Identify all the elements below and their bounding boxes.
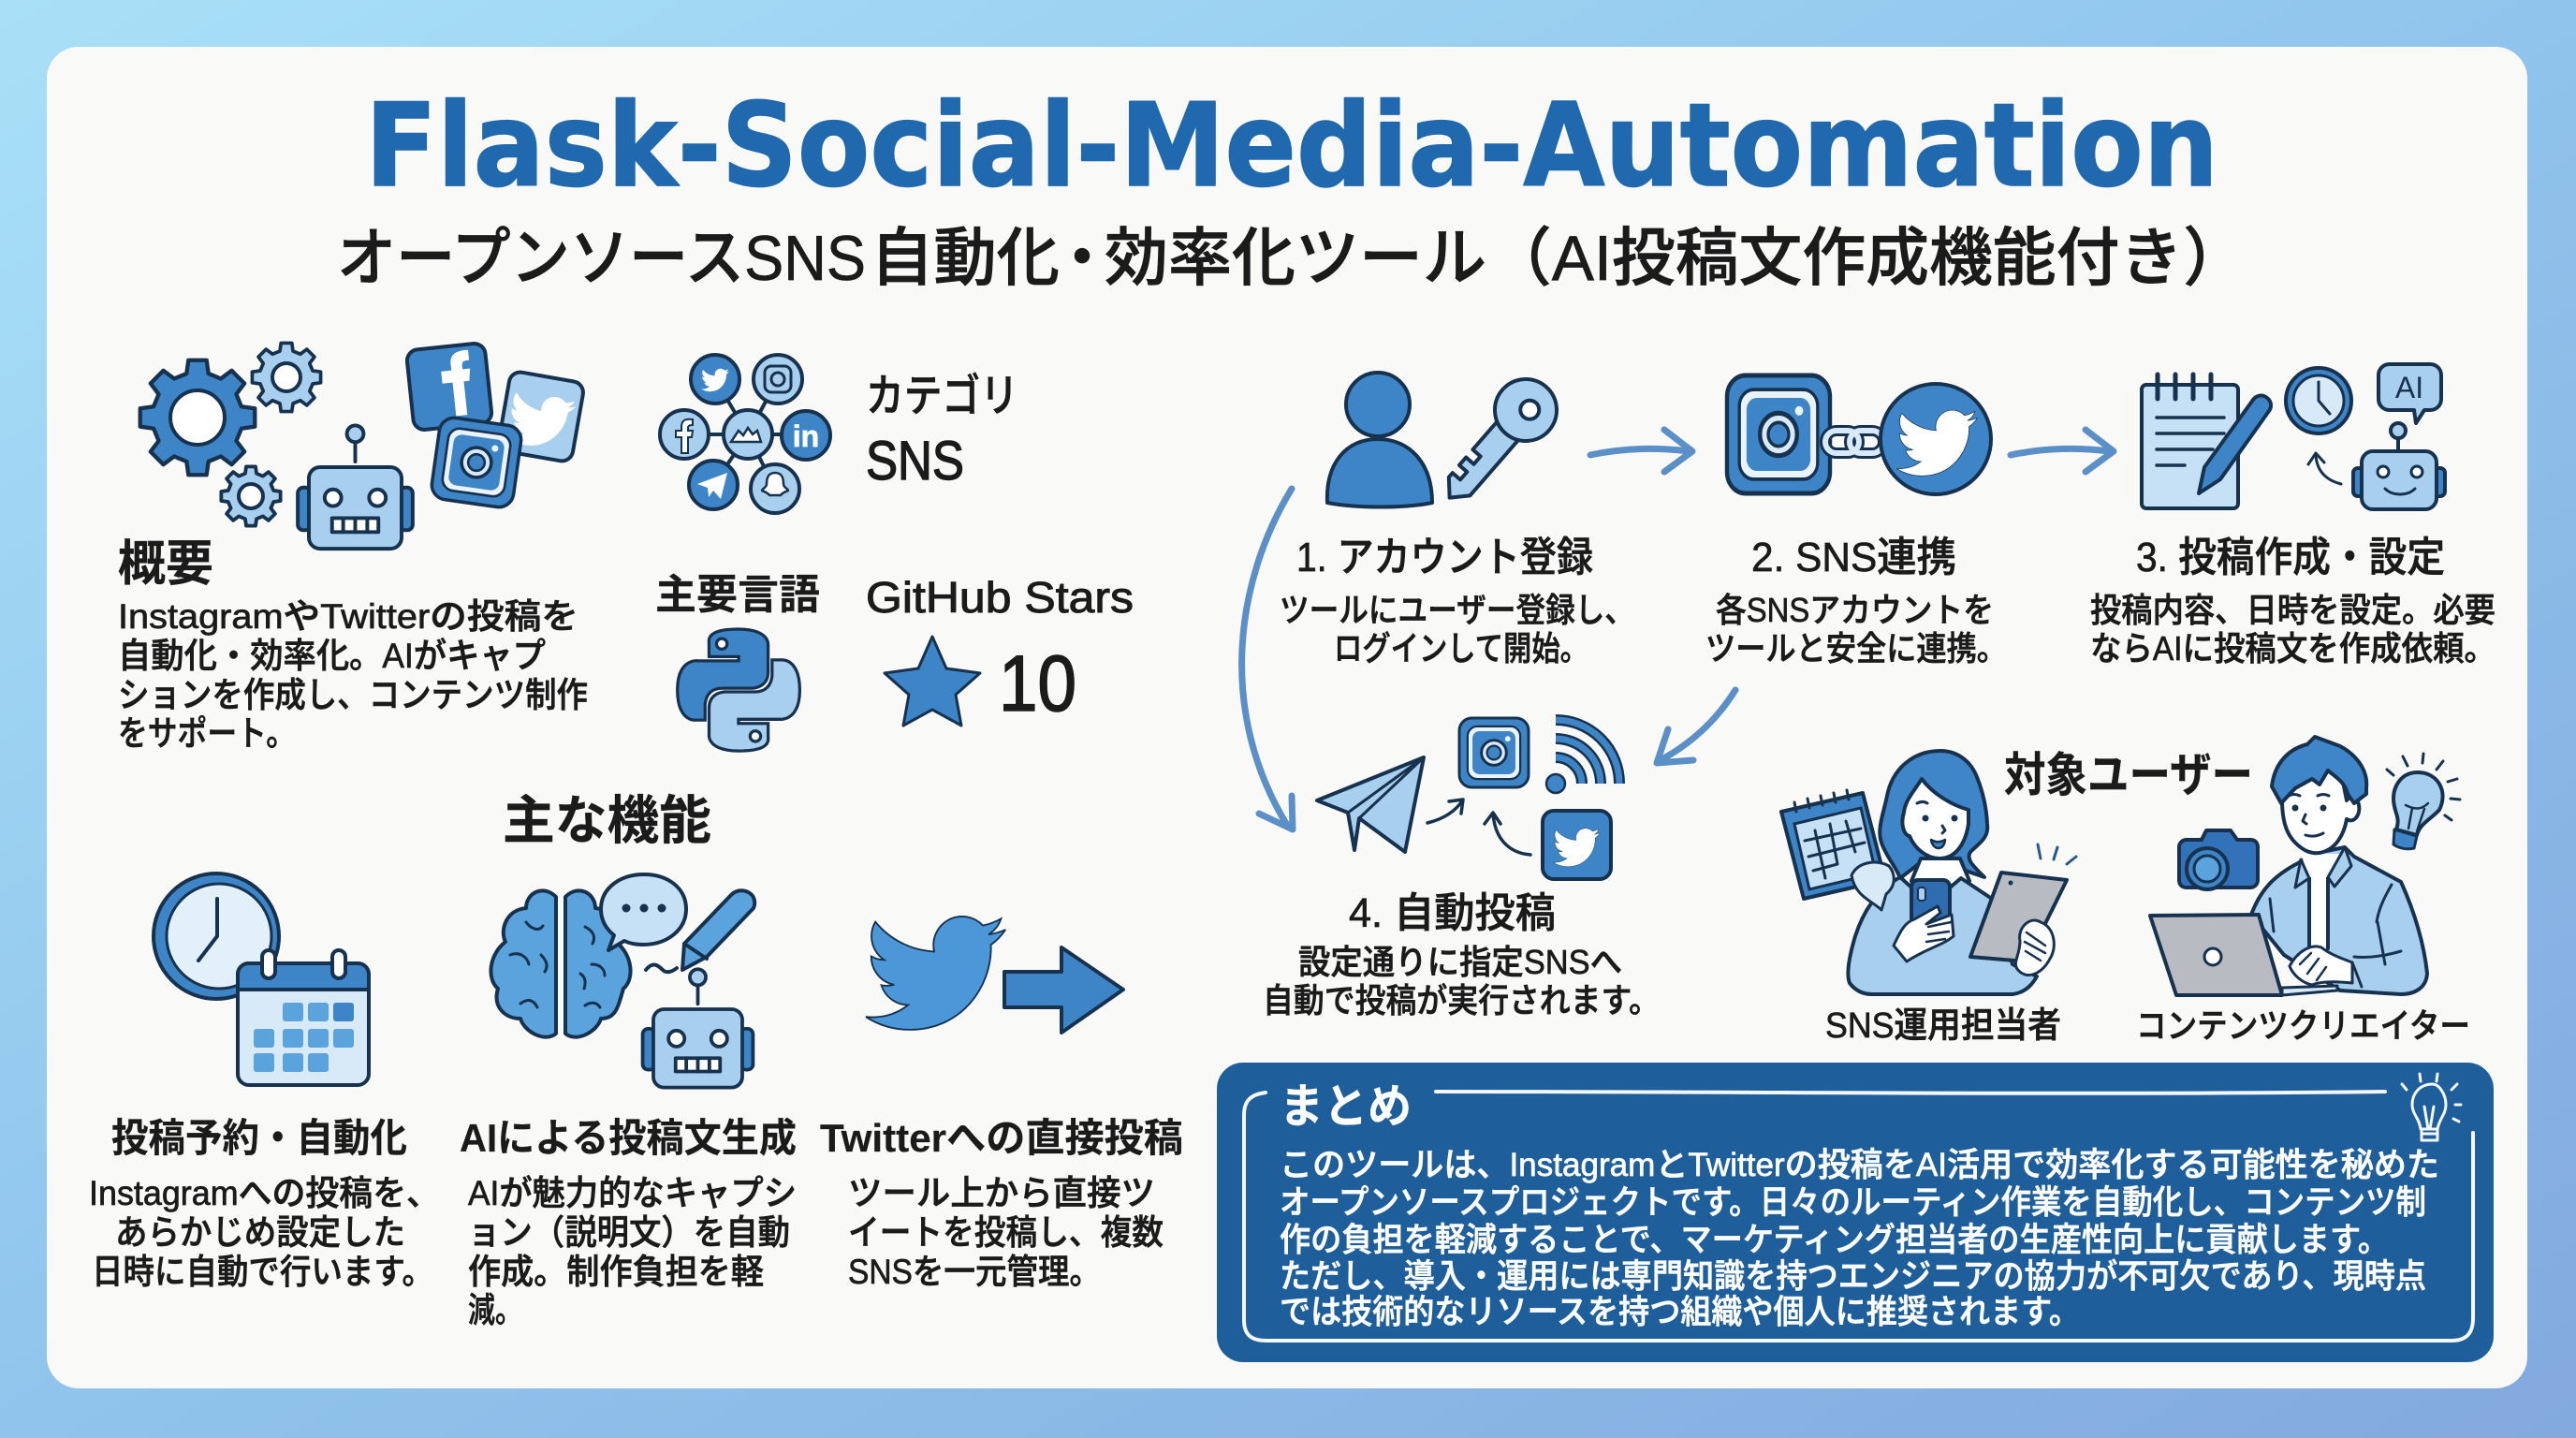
text: feature 3 description: ツール上から直接ツ bbox=[848, 1174, 1155, 1212]
heading: feature 2: AIによる投稿文生成 bbox=[460, 1116, 797, 1160]
text: step 4 description: 自動で投稿が実行されます。 bbox=[1263, 981, 1660, 1020]
icon: notepad, pencil, clock, AI bubble and robot: AI bbox=[2395, 371, 2423, 404]
text: step 1 description: ログインして開始。 bbox=[1334, 629, 1588, 668]
text: feature 2 description: ョン（説明文）を自動 bbox=[468, 1213, 790, 1252]
text: step 2 description: ツールと安全に連携。 bbox=[1705, 629, 2007, 668]
text: feature 2 description: AIが魅力的なキャプシ bbox=[468, 1174, 797, 1212]
text: feature 2 description bbox=[468, 1174, 797, 1329]
subtitle: オープンソースSNS bbox=[337, 223, 866, 294]
icon: SNS network bbox=[660, 355, 830, 513]
heading: step 3: 3. 投稿作成・設定 bbox=[2136, 535, 2445, 580]
icon: paper plane with instagram, signal and twitter bbox=[1317, 718, 1619, 879]
text: step 2 description: 各SNSアカウントを bbox=[1716, 591, 1994, 629]
icon: clock and calendar bbox=[154, 873, 369, 1085]
text: step 2 description bbox=[1705, 591, 2007, 668]
text: step 4 description: 設定通りに指定SNSへ bbox=[1298, 943, 1622, 981]
text: summary body: 作の負担を軽減することで、マーケティング担当者の生産性向上に貢献します。 bbox=[1280, 1221, 2389, 1258]
category label: カテゴリ bbox=[866, 372, 1018, 421]
text: step 1 description: ツールにユーザー登録し、 bbox=[1280, 591, 1634, 629]
category value: SNS bbox=[866, 431, 964, 492]
subtitle bbox=[337, 223, 2247, 294]
stars count: 10 bbox=[999, 639, 1076, 727]
illustration: content creator with laptop, camera and bulb bbox=[2150, 737, 2460, 995]
text: feature 3 description bbox=[848, 1174, 1164, 1291]
text: feature 3 description: SNSを一元管理。 bbox=[848, 1253, 1101, 1291]
text: step 3 description: ならAIに投稿文を作成依頼。 bbox=[2090, 629, 2496, 668]
text: feature 1 description: 日時に自動で行います。 bbox=[92, 1253, 433, 1291]
heading: summary: まとめ bbox=[1280, 1080, 1412, 1133]
label: main language: 主要言語 bbox=[655, 572, 820, 618]
arrow: step 1 to 4 long curve bbox=[1242, 489, 1293, 829]
text: step 3 description bbox=[2090, 591, 2496, 668]
text: overview description: をサポート。 bbox=[118, 714, 296, 753]
subtitle: 効率化ツール bbox=[1105, 223, 1486, 294]
heading: step 1: 1. アカウント登録 bbox=[1296, 535, 1593, 580]
subtitle: ・ bbox=[1050, 223, 1114, 294]
heading: target users: 対象ユーザー bbox=[2004, 749, 2253, 801]
icon: light bulb bbox=[2402, 1074, 2461, 1140]
heading: step 2: 2. SNS連携 bbox=[1751, 535, 1956, 580]
text: feature 1 description bbox=[89, 1174, 440, 1291]
icon: star bbox=[885, 637, 980, 726]
icon: notepad, pencil, clock, AI bubble and robot bbox=[2142, 364, 2445, 509]
text: overview description: ションを作成し、コンテンツ制作 bbox=[118, 676, 588, 714]
icon: person and key bbox=[1327, 366, 1570, 518]
text: summary body: では技術的なリソースを持つ組織や個人に推奨されます。 bbox=[1280, 1293, 2080, 1330]
heading: feature 1: 投稿予約・自動化 bbox=[111, 1116, 407, 1160]
text: overview description bbox=[118, 597, 588, 753]
heading: main features: 主な機能 bbox=[503, 791, 711, 850]
label: GitHub stars: GitHub Stars bbox=[866, 573, 1134, 622]
text: summary body: ただし、導入・運用には専門知識を持つエンジニアの協力が不可欠であり、現時点 bbox=[1280, 1257, 2426, 1295]
icon: instagram linked with twitter bbox=[1727, 375, 1991, 494]
text: step 1 description bbox=[1280, 591, 1634, 668]
text: feature 1 description: Instagramへの投稿を、 bbox=[89, 1174, 440, 1212]
text: feature 1 description: あらかじめ設定した bbox=[115, 1213, 405, 1252]
text: feature 2 description: 減。 bbox=[468, 1291, 522, 1329]
text: step 4 description bbox=[1263, 943, 1660, 1020]
arrow: step 2 to 4 bbox=[1657, 690, 1735, 763]
text: summary body: このツールは、InstagramとTwitterの投稿をAI活用で効率化する可能性を秘めた bbox=[1280, 1146, 2439, 1183]
panel: summary bbox=[1217, 1063, 2494, 1362]
label: content creator: コンテンツクリエイター bbox=[2136, 1006, 2470, 1045]
arrow: step 2 to 3 bbox=[2011, 430, 2114, 472]
heading: overview: 概要 bbox=[118, 537, 213, 592]
text: overview description: 自動化・効率化。AIがキャプ bbox=[118, 637, 546, 675]
heading: step 4: 4. 自動投稿 bbox=[1349, 890, 1556, 936]
heading: feature 3: Twitterへの直接投稿 bbox=[820, 1116, 1183, 1160]
label: SNS manager: SNS運用担当者 bbox=[1825, 1006, 2061, 1046]
icon: python logo bbox=[678, 629, 799, 751]
title: Flask-Social-Media-Automation bbox=[365, 80, 2218, 213]
icon: gears, robot and social cards bbox=[140, 343, 585, 549]
icon: brain, speech bubble, pencil and robot bbox=[490, 874, 754, 1088]
illustration: SNS manager with calendar and tablet bbox=[1781, 751, 2076, 994]
text: overview description: InstagramやTwitterの投稿を bbox=[118, 597, 578, 636]
icon: twitter bird with arrow bbox=[866, 917, 1123, 1033]
text: feature 3 description: イートを投稿し、複数 bbox=[848, 1213, 1164, 1252]
subtitle: （AI投稿文作成機能付き） bbox=[1488, 223, 2247, 294]
icon: SNS network: in bbox=[793, 419, 819, 453]
text: feature 2 description: 作成。制作負担を軽 bbox=[468, 1253, 764, 1291]
subtitle: 自動化 bbox=[871, 223, 1060, 294]
arrow: step 1 to 2 bbox=[1590, 430, 1692, 472]
text: step 3 description: 投稿内容、日時を設定。必要 bbox=[2090, 591, 2496, 629]
text: summary body bbox=[1280, 1146, 2439, 1330]
text: summary body: オープンソースプロジェクトです。日々のルーティン作業を自動化し、コンテンツ制 bbox=[1280, 1183, 2426, 1221]
